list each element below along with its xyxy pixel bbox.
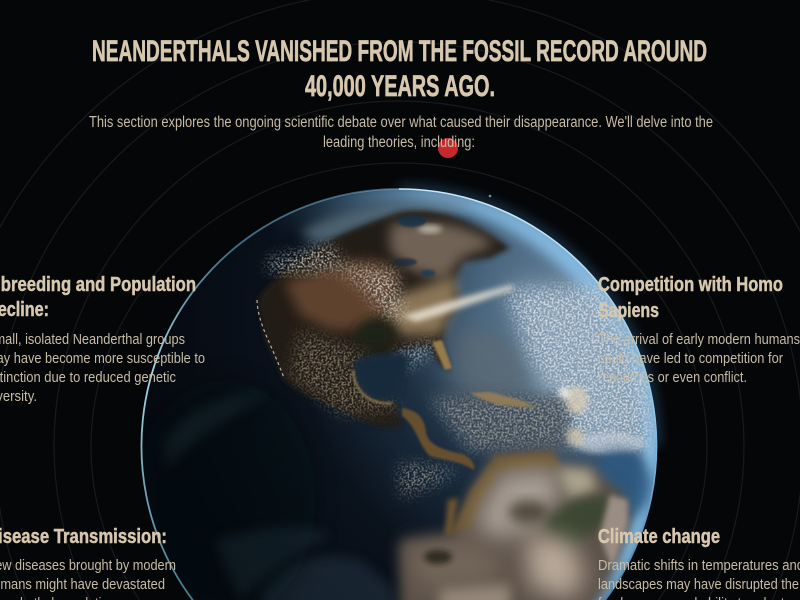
cream cloud streak <box>402 285 515 322</box>
atmosphere band <box>284 189 656 600</box>
left darkening <box>168 398 301 590</box>
outer blue glow <box>399 189 656 446</box>
speckled wedge west of central america <box>400 462 458 498</box>
panel: competition with homo sapiens <box>598 274 800 386</box>
panel: competition with homo sapiens: Sapiens <box>598 300 659 322</box>
small star <box>489 195 491 197</box>
north america land <box>257 211 515 428</box>
panel: climate change <box>598 526 800 600</box>
polar streaks <box>300 200 470 245</box>
great lakes <box>398 215 426 227</box>
panel: disease transmission <box>0 526 176 600</box>
panel: inbreeding and population decline <box>0 274 205 405</box>
night side clouds <box>165 393 395 600</box>
panel: climate change: Climate change <box>598 526 720 548</box>
land speckles <box>268 245 345 272</box>
intro text <box>89 114 713 151</box>
mexico coast <box>353 370 392 403</box>
cumulus clouds <box>559 386 645 454</box>
earth globe <box>135 189 657 600</box>
panel: competition with homo sapiens: resources or even conflict. <box>598 369 747 386</box>
right limb line <box>399 189 657 600</box>
title: 40,000 YEARS AGO. <box>305 70 495 103</box>
blue atlantic patch <box>588 451 652 519</box>
florida <box>432 340 452 370</box>
caribbean islands <box>470 392 538 408</box>
intro text: leading theories, including: <box>323 134 475 151</box>
left limb line <box>141 189 399 600</box>
title <box>92 35 707 103</box>
south america <box>400 450 628 600</box>
central america <box>402 408 474 470</box>
atlantic cloud haze <box>430 285 650 450</box>
gulf of mexico <box>353 354 410 402</box>
red dot <box>438 138 458 158</box>
west coast line <box>257 300 284 378</box>
